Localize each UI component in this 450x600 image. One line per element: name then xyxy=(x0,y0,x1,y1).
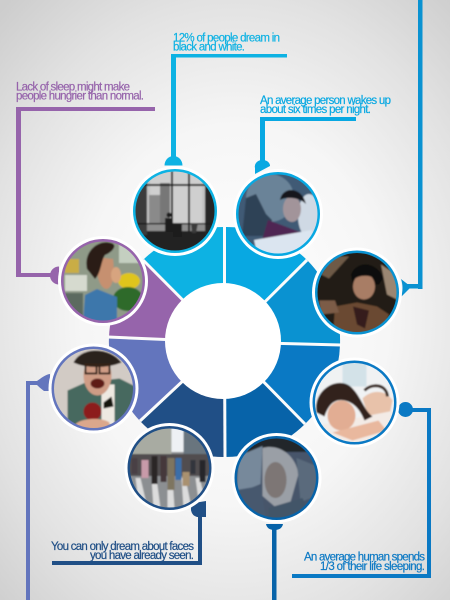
photo: man awake in bed xyxy=(233,169,323,259)
text: black and white dreams: black and white. xyxy=(173,42,245,54)
connector: mid blue top right xyxy=(401,0,422,297)
photo: boy in dark room xyxy=(312,248,402,338)
connector: blue right xyxy=(292,402,431,578)
photo: person at window in black and white xyxy=(130,166,220,256)
text: wakes up: An average person wakes up xyxy=(260,95,391,107)
connector: sky blue xyxy=(255,117,356,174)
photo: old man eating an apple xyxy=(48,344,138,434)
connector: cyan xyxy=(164,54,287,166)
connector: dark blue bottom xyxy=(266,524,283,600)
text: life sleeping: An average human spends xyxy=(304,552,425,564)
connector: periwinkle xyxy=(26,374,50,600)
photo: man eating at the fridge xyxy=(58,236,148,326)
photo: woman sleeping xyxy=(310,358,400,448)
text: wakes up: about six times per night. xyxy=(260,104,371,116)
photo: old man sleeping xyxy=(232,433,322,523)
segmented ring chart xyxy=(108,226,341,458)
text: faces: You can only dream about faces xyxy=(51,541,194,553)
text: hunger: Lack of sleep might make xyxy=(16,82,130,94)
connector: navy xyxy=(52,501,206,565)
text: hunger: people hungrier than normal. xyxy=(16,90,144,102)
connector: purple xyxy=(16,107,155,284)
photo: crowd crossing a street xyxy=(124,423,214,513)
text: life sleeping: 1/3 of their life sleeping. xyxy=(320,561,425,573)
text: black and white dreams: 12% of people dream in xyxy=(173,32,280,44)
text: faces: you have already seen. xyxy=(90,550,194,562)
